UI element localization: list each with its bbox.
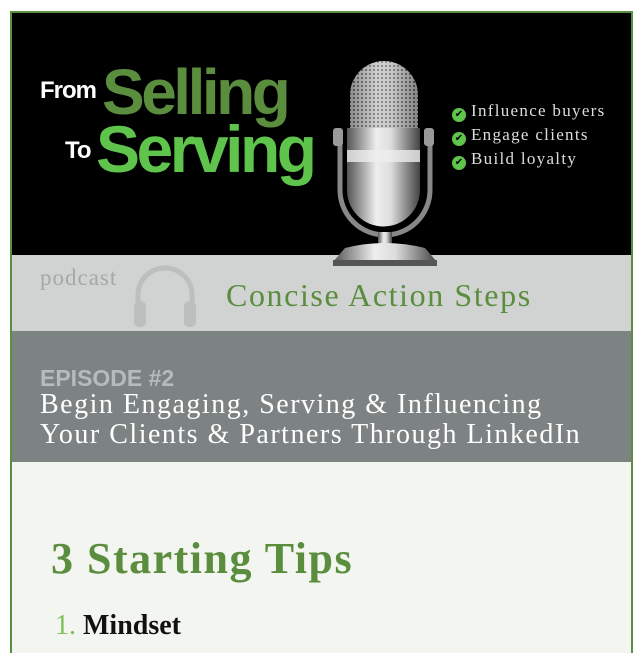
title: From Selling To Serving: From [40,77,96,104]
episode title: Your Clients & Partners Through LinkedIn [40,419,581,450]
item: Influence buyers: Influence buyers [471,101,606,120]
tip 1: Mindset: 1. Mindset [55,610,181,641]
heading: 3 Starting Tips: 3 Starting Tips [51,534,353,583]
title: From Selling To Serving [40,56,314,186]
subtitle: Concise Action Steps: Concise Action Steps [226,277,532,313]
title: From Selling To Serving: To [65,137,91,164]
item: Engage clients: Engage clients [471,125,589,144]
item: Engage clients: ✔ [455,133,463,144]
title: From Selling To Serving: Selling [102,56,287,128]
panel: episode [12,331,631,462]
header: black banner [12,13,631,255]
item: Build loyalty: Build loyalty [471,149,577,168]
title: From Selling To Serving: Serving [96,112,314,186]
episode number: EPISODE #2 [40,365,174,391]
checklist [452,101,606,170]
item: Build loyalty: ✔ [455,157,463,168]
item: Influence buyers: ✔ [455,109,463,120]
icon: headphones [134,266,196,327]
podcast label: podcast [40,265,117,290]
episode title [40,389,581,450]
episode title: Begin Engaging, Serving & Influencing [40,389,543,420]
icon: microphone [333,61,437,266]
band: podcast concise action steps [12,255,631,331]
